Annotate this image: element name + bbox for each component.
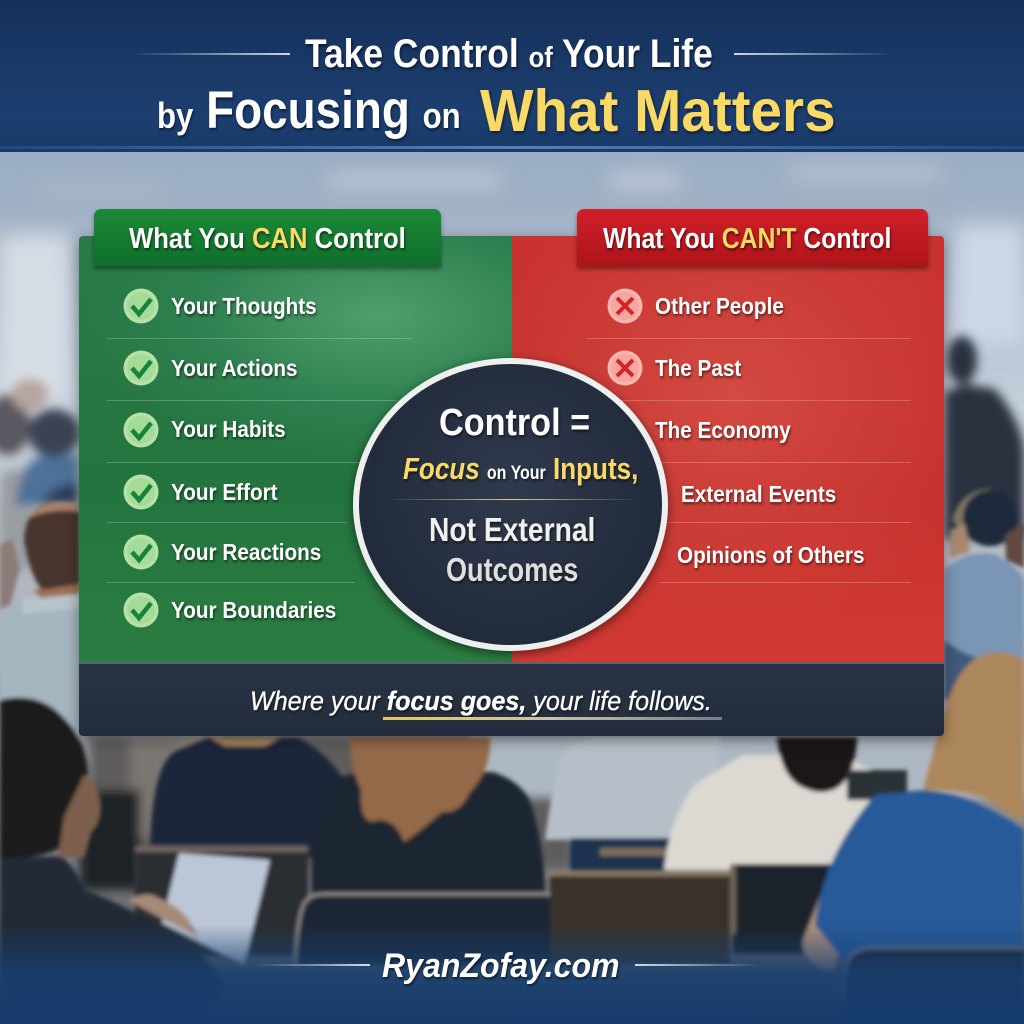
center circle callout (353, 358, 668, 651)
item: the past: The Past (655, 355, 741, 381)
chair front centre (295, 894, 566, 965)
title highlight: what matters: What Matters (480, 78, 836, 144)
laptop screen (162, 853, 270, 965)
item: your reactions: Your Reactions (171, 539, 321, 565)
title banner (0, 0, 1024, 152)
right man (944, 553, 1024, 678)
decorative title line right (734, 53, 894, 55)
tagline underline (383, 717, 722, 720)
chair behind navy with rail (135, 846, 308, 956)
tab: what you can't control: What You CAN'T Control (603, 223, 891, 255)
item: your habits: Your Habits (171, 416, 286, 442)
list: what you can't control (608, 288, 866, 572)
item: your thoughts (124, 288, 318, 324)
blue shirt woman (815, 790, 1024, 960)
item: opinions of others: Opinions of Others (677, 542, 864, 568)
item: other people: Other People (655, 293, 784, 319)
banner glow line (0, 146, 1024, 149)
left man hand (128, 894, 198, 936)
back row left (0, 395, 30, 455)
white-blue man (545, 737, 720, 840)
brown table (550, 874, 730, 964)
callout line 4: Outcomes (446, 551, 578, 588)
left man shirt (0, 856, 226, 1024)
item: your boundaries: Your Boundaries (171, 597, 336, 623)
item: your habits (124, 412, 287, 448)
foreground left man behind panel (0, 593, 80, 763)
callout line 2: Focus on Your Inputs, (403, 451, 638, 486)
item: your actions: Your Actions (171, 355, 298, 381)
item: your reactions (124, 534, 322, 570)
left head behind (15, 455, 78, 505)
front right chair (843, 948, 1024, 1024)
red panel (512, 236, 944, 662)
blonde hair (923, 652, 1024, 822)
item: other people (608, 288, 786, 324)
dark chair right (733, 864, 845, 954)
tab: what you can control (94, 209, 441, 266)
back row centre band (90, 737, 570, 867)
callout line 3: Not External (429, 511, 595, 548)
right silhouette (945, 384, 1024, 539)
decorative title line left (130, 53, 290, 55)
item: your boundaries (124, 592, 338, 628)
website line left (255, 964, 370, 966)
left man ear and neck (58, 775, 101, 857)
item: your effort (124, 474, 279, 510)
item: external events: External Events (681, 481, 836, 507)
footer band (79, 662, 944, 736)
item: your effort: Your Effort (171, 479, 278, 505)
left man hair (0, 698, 88, 858)
list: what you can control (124, 288, 338, 628)
footer tagline: Where your focus goes, your life follows. (250, 686, 712, 716)
tab: what you can't control (577, 209, 928, 266)
website line right (635, 964, 760, 966)
callout line 1: Control = (439, 402, 590, 444)
item: your actions (124, 350, 299, 386)
website name: RyanZofay.com (382, 947, 620, 985)
title line 1: Take Control of Your Life (305, 32, 713, 76)
green panel (79, 236, 512, 662)
item: your thoughts: Your Thoughts (171, 293, 317, 319)
item: the past (608, 350, 744, 386)
item: the economy: The Economy (655, 417, 791, 443)
callout divider (387, 499, 637, 500)
arm (803, 894, 849, 972)
title line 2: by Focusing on (157, 81, 461, 140)
centre woman (312, 772, 545, 895)
main panel (79, 236, 944, 736)
white shirt woman (664, 755, 885, 870)
tab: what you can control: What You CAN Control (129, 223, 406, 255)
navy man (150, 738, 348, 858)
